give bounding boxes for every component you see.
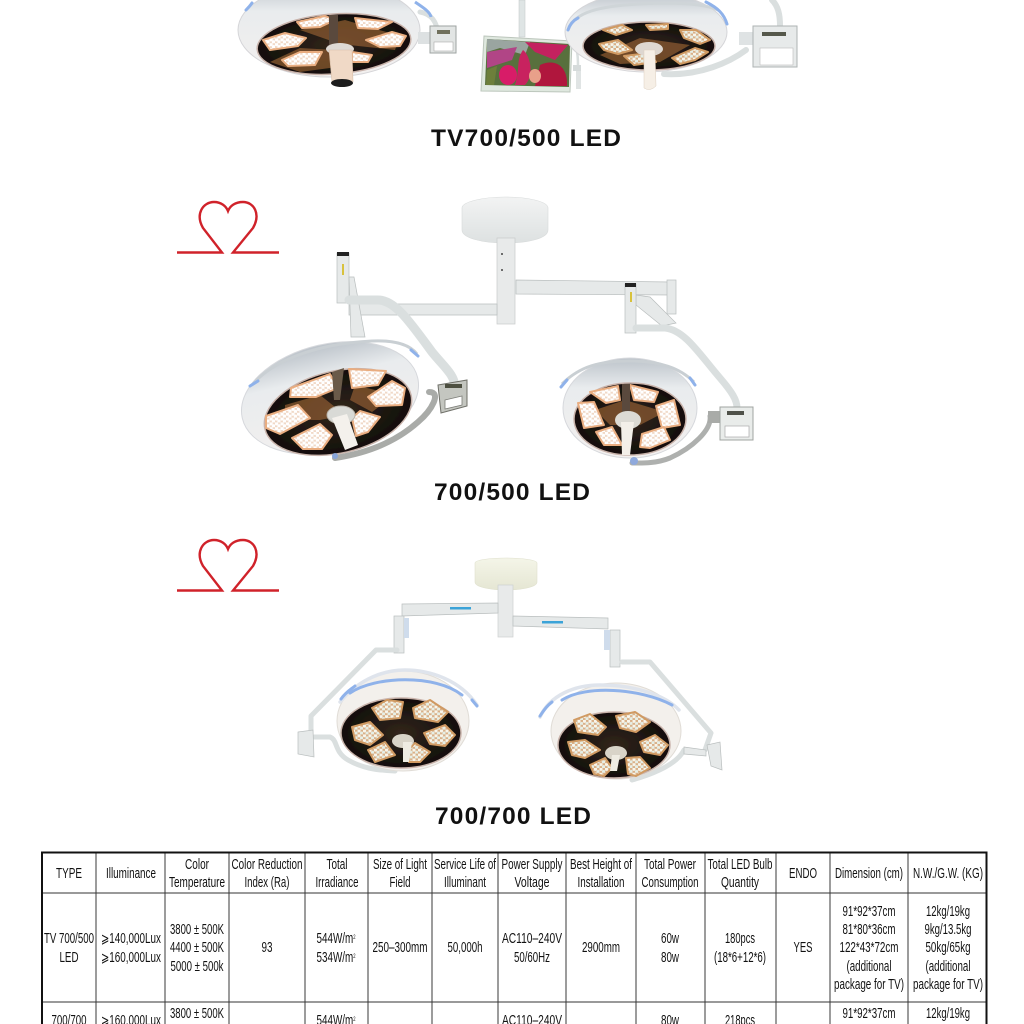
table row: 700/700 LED (cut off by page edge): 2 [353,1017,356,1023]
table row: TV 700/500 LED: YES [794,940,812,956]
table header row: Installation [578,875,624,891]
table header row: Illuminant [444,875,486,891]
table header row: Best Height of [570,857,633,873]
product photo: 700/500 LED lamps [230,197,753,471]
table row: TV 700/500 LED: 544W/m [316,931,370,947]
table header row: Irradiance [316,875,358,891]
table row: TV 700/500 LED: 50,000h [448,940,482,956]
table grid [41,852,987,1024]
table header row: Quantity [721,875,760,891]
suspension arms [337,252,676,337]
left lamp [298,650,477,771]
right lamp [540,662,722,780]
product photo: TV700/500 LED lamps [238,0,797,92]
table row: TV 700/500 LED: ⩾160,000Lux [101,950,162,966]
table row: TV 700/500 LED: 122*43*72cm [840,940,898,956]
table row: TV 700/500 LED: 2 [353,954,356,960]
title: 700/500 LED: 700/500 LED [434,479,590,506]
table header row: ENDO [789,866,817,882]
title: TV700/500 LED: TV700/500 LED [431,125,621,152]
table row: TV 700/500 LED: 50kg/65kg [926,940,970,956]
right lamp [561,328,737,465]
table row: TV 700/500 LED: 12kg/19kg [926,904,970,920]
table row: TV 700/500 LED: 3800 ± 500K [170,922,224,938]
table header row: Color Reduction [232,857,302,873]
left control panel [418,26,456,53]
left lamp [230,300,455,471]
table row: TV 700/500 LED: LED [60,950,78,966]
ceiling mount [462,197,548,324]
right lamp [565,0,780,90]
icon: red heart line 1 [177,202,279,252]
table header row: Temperature [169,875,225,891]
table row: TV 700/500 LED: 50/60Hz [514,950,550,966]
monitor arm [519,0,581,89]
table row: TV 700/500 LED: ⩾140,000Lux [101,931,162,947]
table row: TV 700/500 LED: (18*6+12*6) [714,950,766,966]
suspension arms [394,603,620,667]
table row: TV 700/500 LED: 81*80*36cm [842,922,896,938]
left lamp with camera [238,0,438,87]
table header row: Illuminance [106,866,156,882]
table row: TV 700/500 LED: package for TV) [913,977,983,993]
table row: TV 700/500 LED: AC110–240V [502,931,562,947]
left control panel [438,380,467,413]
table row: TV 700/500 LED: (additional [846,959,892,975]
right control panel and arm [664,26,797,74]
product photo: 700/700 LED lamps [298,558,722,780]
table header row: Voltage [514,875,550,891]
table header row: Power Supply [502,857,563,873]
title: 700/700 LED: 700/700 LED [435,803,591,830]
table header row: N.W./G.W. (KG) [913,866,983,882]
table row: TV 700/500 LED: 180pcs [725,931,755,947]
table row: TV 700/500 LED: 5000 ± 500k [170,959,224,975]
table row: TV 700/500 LED: TV 700/500 [44,931,94,947]
table row: TV 700/500 LED: package for TV) [834,977,904,993]
table row: TV 700/500 LED: 9kg/13.5kg [924,922,972,938]
table row: TV 700/500 LED: 4400 ± 500K [170,940,224,956]
table row: TV 700/500 LED: 534W/m [316,950,370,966]
table header row: Total [326,857,348,873]
table header row: Size of Light [373,857,427,873]
table header row: Index (Ra) [244,875,290,891]
table row: 700/700 LED (cut off by page edge) [52,1006,970,1024]
table header row: Service Life of [434,857,497,873]
table row: 700/700 LED (cut off by page edge): 91*92*37cm [842,1006,896,1022]
monitor with flower picture [481,36,572,92]
table header row: Color [185,857,209,873]
specification table [41,852,987,1024]
right control panel [708,407,753,440]
icon: red heart line 2 [177,540,279,590]
table row: 700/700 LED (cut off by page edge): 12kg/19kg [926,1006,970,1022]
table header row: Total LED Bulb [708,857,772,873]
table header row: Consumption [642,875,698,891]
table row: TV 700/500 LED: (additional [926,959,970,975]
table header row: TYPE [56,866,82,882]
table header row: Total Power [644,857,696,873]
table header row: Dimension (cm) [835,866,903,882]
table row: TV 700/500 LED: 91*92*37cm [842,904,896,920]
table row: 700/700 LED (cut off by page edge): 3800 ± 500K [170,1006,224,1022]
table row: TV 700/500 LED: 60w [661,931,679,947]
table header row [56,857,983,891]
table row: TV 700/500 LED: 93 [262,940,272,956]
table row: TV 700/500 LED: 2 [353,935,356,941]
table row: TV 700/500 LED: 250–300mm [372,940,428,956]
ceiling mount [475,558,537,637]
table row: TV 700/500 LED: 80w [661,950,679,966]
table header row: Field [390,875,410,891]
table row: TV 700/500 LED [44,904,983,993]
table row: TV 700/500 LED: 2900mm [582,940,620,956]
